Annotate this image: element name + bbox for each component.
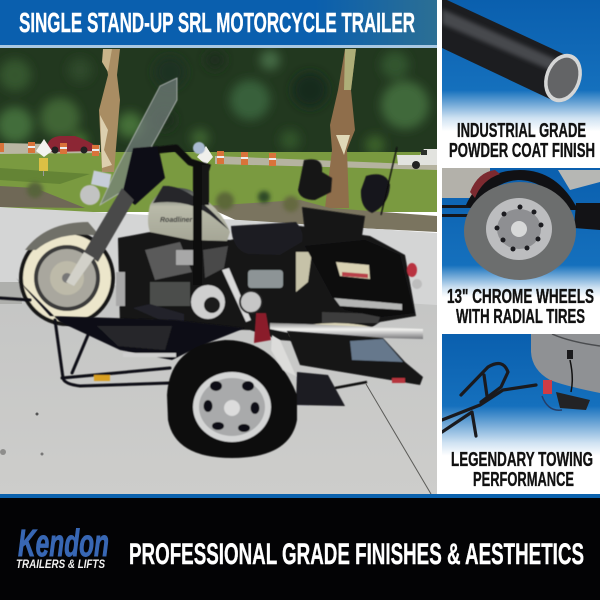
wheel photo (442, 168, 600, 280)
fairing and front fork (66, 146, 165, 286)
concrete floor and curb (0, 207, 437, 494)
exhaust pipe (270, 323, 423, 339)
motorcycle (19, 78, 423, 345)
foot board (134, 304, 184, 321)
logo: Kendon (16, 523, 109, 571)
header banner (0, 0, 437, 48)
fuel tank (148, 186, 230, 241)
photo background: road and grass (0, 143, 437, 212)
kickstand chrome and small light (222, 268, 283, 322)
white pickup truck (397, 149, 437, 169)
panel: towing performance (442, 334, 600, 494)
panel: main photo of motorcycle on trailer (0, 48, 437, 494)
logo: Kendon: TRAILERS & LIFTS (16, 559, 105, 571)
trailer (0, 278, 423, 458)
side cover (296, 252, 312, 292)
logo: Kendon: Kendon (18, 523, 109, 565)
license plate (271, 335, 296, 376)
engine (116, 242, 228, 319)
taillight (254, 313, 271, 343)
backrest rear (361, 174, 390, 213)
backrest front (298, 159, 332, 200)
yellow strap buckle (94, 375, 110, 381)
saddlebag (305, 240, 422, 317)
photo background: trees (0, 48, 437, 160)
front wheel (19, 230, 115, 326)
icon: black pipe (442, 0, 588, 108)
traffic barrels (0, 142, 276, 166)
blue divider (0, 494, 600, 498)
rear seat (302, 207, 365, 236)
fuel tank: Roadliner (160, 217, 194, 224)
loading ramp (296, 372, 345, 406)
rear wheel (288, 312, 381, 338)
towing photo (442, 334, 600, 436)
trailer wheel (167, 340, 297, 458)
dark bike silhouette (118, 226, 416, 345)
rear deck (287, 331, 423, 385)
road signs (36, 139, 213, 176)
antenna (381, 147, 397, 215)
front fender (25, 222, 100, 250)
landscaping mulch and rocks (0, 182, 437, 232)
seat (231, 222, 303, 255)
panel: chrome wheels (442, 168, 600, 330)
palm tree right (325, 49, 356, 208)
panel: powder coat finish (442, 0, 600, 164)
trailer frame rails (0, 298, 170, 386)
windscreen (100, 78, 177, 205)
chrome tube (123, 353, 176, 357)
palm tree left (99, 49, 120, 172)
trailer front deck (16, 278, 245, 360)
red parked car (47, 136, 94, 154)
footer band (0, 498, 600, 600)
handlebars (158, 142, 210, 285)
